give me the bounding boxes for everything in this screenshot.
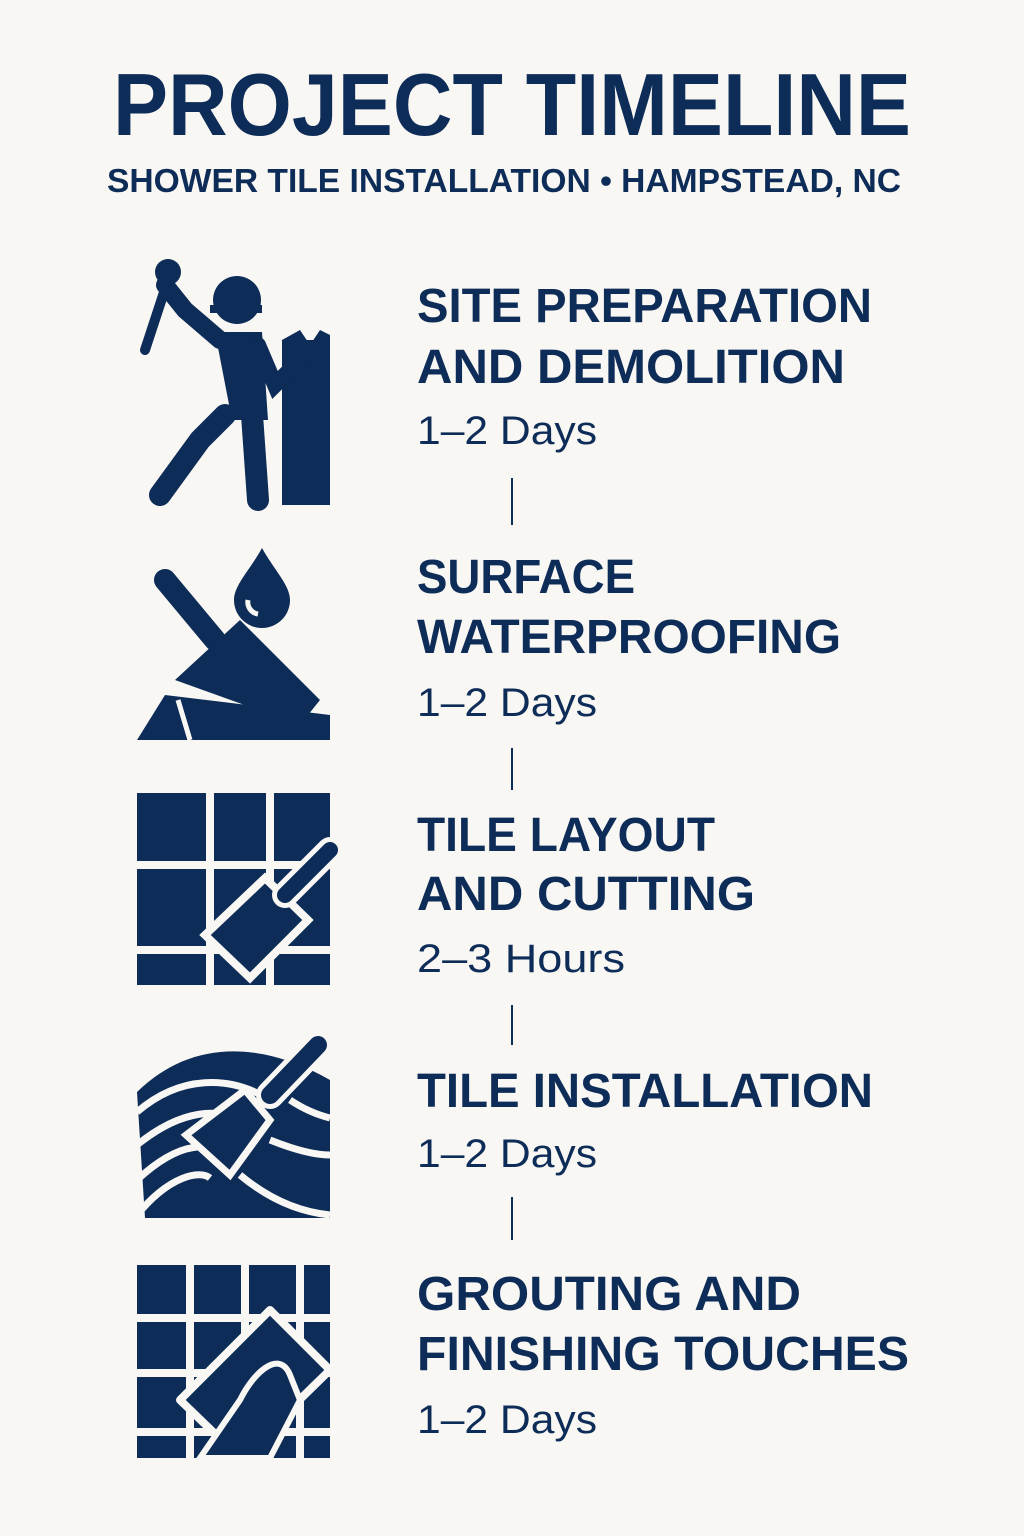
heading: step 5: 1–2 Days xyxy=(417,1398,597,1442)
heading: step 4: 1–2 Days xyxy=(417,1132,597,1176)
heading: step 3: AND CUTTING xyxy=(417,868,755,921)
heading: step 1: SITE PREPARATION xyxy=(417,280,872,333)
heading: step 5: FINISHING TOUCHES xyxy=(417,1328,909,1381)
heading: step 3: TILE LAYOUT xyxy=(417,809,715,862)
heading: step 2: SURFACE xyxy=(417,551,635,604)
icon: trowel and water drop xyxy=(137,548,330,740)
icon: demolition worker xyxy=(145,259,330,505)
heading: step 1: AND DEMOLITION xyxy=(417,341,845,394)
heading: step 2: 1–2 Days xyxy=(417,681,597,725)
heading: step 1 xyxy=(417,280,872,453)
heading: step 1: 1–2 Days xyxy=(417,409,597,453)
title: PROJECT TIMELINE xyxy=(113,55,911,154)
heading: step 4: TILE INSTALLATION xyxy=(417,1065,873,1118)
heading: step 3 xyxy=(417,809,755,981)
heading: step 5: GROUTING AND xyxy=(417,1268,801,1321)
heading: step 4 xyxy=(417,1065,873,1176)
subtitle: SHOWER TILE INSTALLATION • HAMPSTEAD, NC xyxy=(107,162,901,199)
heading: step 3: 2–3 Hours xyxy=(417,937,625,981)
icon: grout float with hand xyxy=(137,1265,330,1458)
heading: step 5 xyxy=(417,1268,909,1442)
heading: step 2: WATERPROOFING xyxy=(417,611,841,664)
heading: step 2 xyxy=(417,551,841,725)
icon: waves with trowel xyxy=(137,1045,330,1218)
icon: tile grid with trowel xyxy=(137,793,330,985)
